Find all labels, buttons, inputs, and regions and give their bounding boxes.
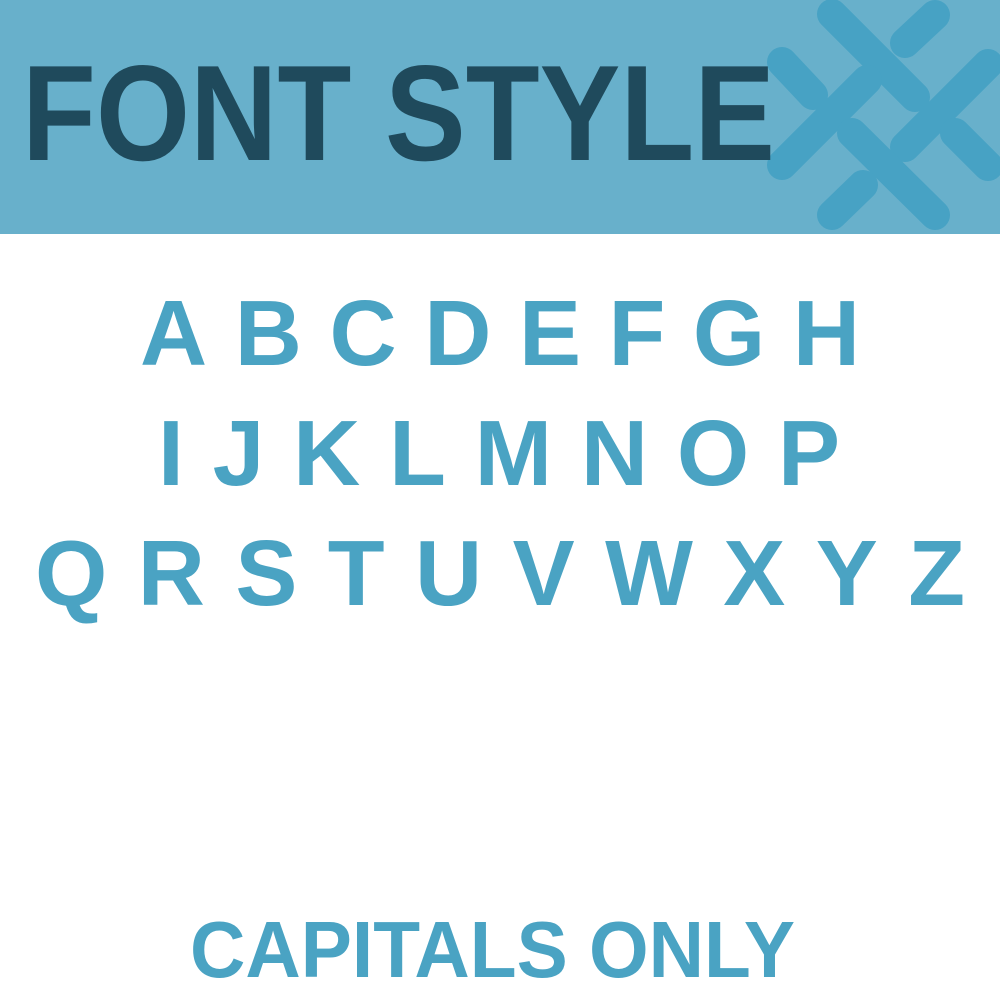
row Q-Z: QRSTUVWXYZ (35, 521, 965, 625)
icon: woven x pattern (782, 14, 988, 215)
row A-H: ABCDEFGH (140, 281, 860, 385)
header band (0, 0, 1000, 234)
footer caption: CAPITALS ONLY (190, 905, 795, 994)
title: FONT STYLE (22, 37, 775, 189)
alphabet display (35, 281, 965, 625)
row I-P: IJKLMNOP (158, 401, 840, 505)
